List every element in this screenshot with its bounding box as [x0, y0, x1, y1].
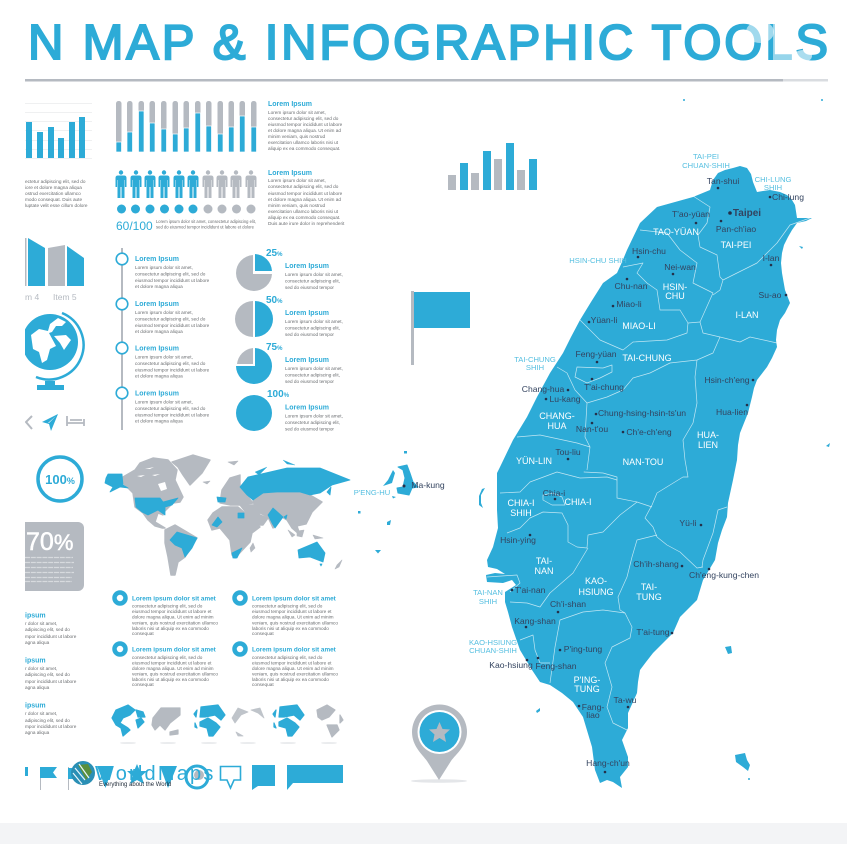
county labels: P'ING-: [574, 675, 600, 685]
timeline: consectetur adipiscing elit, sed do: [135, 406, 206, 411]
text grid: four features: Lorem ipsum dolor sit amet: [132, 596, 217, 602]
left column text list: ipsum: [25, 702, 46, 710]
left column text list: agna aliqua: [25, 685, 50, 690]
row of small globes: [112, 705, 343, 744]
text block: bars description: [268, 101, 343, 151]
county labels: TAI-: [536, 556, 552, 566]
logo: WorldMaps watermark: [71, 761, 216, 788]
timeline: eiusmod tempor incididunt ut labore: [135, 278, 210, 283]
footer band: [0, 823, 847, 844]
text grid: four features: laboris nisi ut aliquip ex ea commodo: [252, 626, 329, 631]
city labels: P'ing-tung: [564, 644, 602, 654]
score 60/100: 60/100: [116, 219, 153, 233]
city labels: Feng-shan: [535, 661, 577, 671]
county labels: TAI-PEI: [721, 240, 751, 250]
text block: bars description: exercitation ullamco laboris nisi ut: [268, 140, 339, 145]
text grid: four features: veniam, quis nostrud exercitation ullamco: [132, 672, 218, 676]
city labels: Ch'eng-kung-chen: [689, 570, 759, 580]
text block: bars description: consectetur adipiscing elit, sed do: [268, 116, 339, 121]
text grid: four features: consequat: [252, 682, 274, 687]
icon: flag: [411, 291, 470, 365]
city labels: Pan-ch'iao: [716, 224, 756, 234]
county labels: MIAO-LI: [622, 321, 656, 331]
city labels: Yü-li: [679, 518, 697, 528]
county labels: TAI-: [641, 582, 657, 592]
title: N MAP & INFOGRAPHIC TOOLS: [28, 16, 828, 70]
left column text list: adipiscing elit, sed do: [25, 718, 70, 723]
text grid: four features: consectetur adipiscing elit, sed do: [132, 604, 203, 608]
row of map markers and speech bubbles: [25, 764, 343, 790]
municipality labels outside the coast: SHIH: [479, 597, 497, 606]
pie charts: 75%: [266, 342, 283, 353]
text block: people description: Duis aute irure dolor in reprehenderit: [268, 221, 345, 226]
county labels: YÜN-LIN: [516, 456, 552, 466]
timeline: Lorem ipsum dolor sit amet,: [135, 265, 193, 270]
city labels: Ch'i-shan: [550, 599, 586, 609]
city labels: T'ai-chung: [584, 382, 624, 392]
left column text after chart: modo consequat. Duis aute: [25, 197, 82, 202]
pie charts: Lorem Ipsum: [285, 357, 329, 364]
left column text after chart: ostrud exercitation ullamco: [25, 191, 81, 196]
left column text list: adipiscing elit, sed do: [25, 627, 70, 632]
text block: bars description: et dolore magna aliqua. Ut enim ad: [268, 128, 341, 133]
county labels: TAO-YÜAN: [653, 227, 699, 237]
score 60/100: [116, 219, 256, 233]
folded column chart: m 4: [25, 292, 39, 302]
text grid: four features: consequat: [252, 631, 274, 636]
city labels: Chia-i: [543, 488, 565, 498]
city labels: Lu-kang: [549, 394, 581, 404]
county labels: HSIUNG: [578, 587, 614, 597]
county labels: NAN: [534, 566, 554, 576]
county labels: HUA-: [697, 430, 719, 440]
score 60/100: Lorem ipsum dolor sit amet, consectetur adipiscing elit,: [156, 219, 256, 224]
text grid: four features: veniam, quis nostrud exercitation ullamco: [252, 672, 338, 676]
icon: desk globe: [22, 313, 84, 390]
city labels: Ch'ih-shang: [633, 559, 679, 569]
pie charts: Lorem ipsum dolor sit amet,: [285, 414, 343, 418]
left column text list: adipiscing elit, sed do: [25, 672, 70, 677]
city labels: Hsin-chu: [632, 246, 666, 256]
left crop edge: [0, 0, 25, 822]
timeline: consectetur adipiscing elit, sed do: [135, 361, 206, 366]
timeline: Lorem Ipsum: [135, 346, 179, 352]
municipality labels outside the coast: CHI-LUNG: [755, 175, 791, 184]
timeline: consectetur adipiscing elit, sed do: [135, 272, 206, 276]
municipality labels outside the coast: CHUAN-SHIH: [682, 161, 730, 170]
text grid: four features: consequat: [132, 682, 154, 687]
mainland outline: [486, 166, 812, 788]
text grid: four features: dolore magna aliqua. Ut enim ad minim: [252, 666, 334, 671]
folded column chart: Item 5: [53, 292, 77, 302]
city labels: [489, 176, 804, 768]
mini bar chart above map: [448, 143, 537, 190]
timeline: [116, 248, 210, 430]
timeline: et dolore magna aliqua: [135, 284, 183, 289]
text block: people description: aliquip ex ea commodo consequat.: [268, 215, 340, 220]
municipality labels outside the coast: TAI-CHUNG: [514, 355, 556, 364]
municipality labels outside the coast: SHIH: [526, 363, 544, 372]
left column bar chart: [25, 104, 92, 158]
text grid: four features: dolore magna aliqua. Ut enim ad minim: [132, 614, 214, 620]
city labels: Tan-shui: [707, 176, 739, 186]
municipality labels outside the coast: TAI-PEI: [693, 152, 719, 161]
pie charts: consectetur adipiscing elit,: [285, 420, 340, 425]
city labels: Hsin-ch'eng: [704, 375, 750, 385]
city labels: Hsin-ying: [500, 535, 536, 545]
folded column chart: [25, 238, 84, 302]
county labels: CHIA-I: [508, 498, 534, 508]
left column text list: ipsum: [25, 658, 46, 664]
score 60/100: sed do eiusmod tempor incididunt ut labore et dolore: [156, 224, 254, 230]
pie charts: sed do eiusmod tempor: [285, 379, 334, 384]
timeline: Lorem ipsum dolor sit amet,: [135, 400, 193, 404]
text grid: four features: dolore magna aliqua. Ut enim ad minim: [252, 614, 334, 620]
pie charts: sed do eiusmod tempor: [285, 285, 334, 290]
left column text list: mpor incididunt ut labore: [25, 634, 77, 639]
text block: people description: eiusmod tempor incididunt ut labore: [268, 191, 343, 196]
city labels: Ch'e-ch'eng: [626, 427, 672, 437]
municipality labels outside the coast: HSIN-CHU SHIH: [569, 256, 627, 265]
logo: WorldMaps watermark: WorldMaps: [95, 763, 216, 785]
city labels: Chang-hua: [522, 384, 564, 394]
text grid: four features: veniam, quis nostrud exercitation ullamco: [132, 620, 218, 626]
text block: people description: Lorem Ipsum: [268, 170, 312, 177]
text grid: four features: eiusmod tempor incididunt ut labore et: [252, 609, 332, 614]
people pictogram: [116, 170, 256, 214]
pie charts: consectetur adipiscing elit,: [285, 326, 340, 330]
pie charts: Lorem Ipsum: [285, 263, 329, 270]
county labels: HSIN-: [663, 282, 687, 292]
text block: people description: [268, 170, 345, 226]
text grid: four features: Lorem ipsum dolor sit amet: [252, 596, 337, 602]
text grid: four features: consectetur adipiscing elit, sed do: [132, 655, 203, 660]
city labels: Nan-t'ou: [576, 424, 608, 434]
pie charts: Lorem Ipsum: [285, 404, 329, 412]
left column text after chart: ectetur adipiscing elit, sed do: [25, 179, 86, 184]
icons: chevron, paper plane, bed: [26, 414, 84, 431]
Penghu labels: P'ENG-HU: [354, 488, 390, 497]
pie charts: Lorem ipsum dolor sit amet,: [285, 366, 343, 371]
text block: people description: consectetur adipiscing elit, sed do: [268, 184, 339, 189]
left column text list: r dolor sit amet,: [25, 711, 57, 716]
left column text after chart: [25, 179, 88, 208]
city labels: Feng-yüan: [575, 349, 617, 359]
municipality labels outside the coast: TAI-NAN: [473, 588, 503, 597]
city labels: Kang-shan: [514, 616, 556, 626]
county labels: SHIH: [510, 508, 532, 518]
left column text list: mpor incididunt ut labore: [25, 724, 77, 729]
text grid: four features: laboris nisi ut aliquip ex ea commodo: [252, 677, 329, 682]
text grid: four features: consectetur adipiscing elit, sed do: [252, 655, 323, 660]
pie charts: Lorem ipsum dolor sit amet,: [285, 272, 343, 277]
city labels: Hua-lien: [716, 407, 748, 417]
municipality labels outside the coast: KAO-HSIUNG: [469, 638, 517, 647]
timeline: eiusmod tempor incididunt ut labore: [135, 368, 210, 372]
county labels: NAN-TOU: [623, 457, 663, 467]
pie charts: Lorem ipsum dolor sit amet,: [285, 319, 343, 324]
text block: bars description: eiusmod tempor incididunt ut labore: [268, 122, 343, 127]
city labels: T'ai-nan: [515, 585, 546, 595]
county labels: CHANG-: [539, 411, 575, 421]
pie charts: 50%: [266, 295, 283, 306]
city labels: liao: [586, 710, 600, 720]
text block: people description: exercitation ullamco laboris nisi ut: [268, 209, 339, 214]
text grid: four features: veniam, quis nostrud exercitation ullamco: [252, 620, 338, 626]
timeline: Lorem ipsum dolor sit amet,: [135, 310, 193, 315]
city labels: I-lan: [763, 253, 780, 263]
timeline: Lorem Ipsum: [135, 256, 179, 263]
county labels: LIEN: [698, 440, 718, 450]
city labels: T'ao-yüan: [672, 209, 710, 219]
timeline: Lorem Ipsum: [135, 301, 179, 308]
county labels: HUA: [547, 421, 567, 431]
text grid: four features: [114, 592, 338, 687]
city labels: Kao-hsiung: [489, 660, 533, 670]
100% ring: 100%: [45, 472, 75, 487]
header rule: [25, 79, 828, 82]
world map: [105, 455, 350, 575]
left column text list: agna aliqua: [25, 640, 50, 645]
city labels: Chung-hsing-hsin-ts'un: [598, 408, 686, 418]
city labels: Su-ao: [759, 290, 782, 300]
text grid: four features: Lorem ipsum dolor sit amet: [252, 646, 337, 654]
Taiwan map: [469, 99, 830, 788]
city labels: Miao-li: [616, 299, 642, 309]
city labels: Chi-lung: [772, 192, 804, 202]
municipality labels outside the coast: SHIH: [764, 183, 782, 192]
logo: WorldMaps watermark: Everything about the World: [99, 782, 171, 788]
timeline: Lorem Ipsum: [135, 390, 179, 398]
Penghu labels: [354, 480, 445, 497]
Penghu labels: Ma-kung: [411, 480, 445, 490]
pie charts: consectetur adipiscing elit,: [285, 278, 340, 284]
pie charts: sed do eiusmod tempor: [285, 426, 334, 432]
text block: people description: minim veniam, quis nostrud: [268, 203, 325, 208]
text grid: four features: eiusmod tempor incididunt ut labore et: [132, 609, 212, 614]
timeline: Lorem ipsum dolor sit amet,: [135, 354, 193, 360]
city labels: Hang-ch'un: [586, 758, 630, 768]
left column text list: mpor incididunt ut labore: [25, 679, 77, 684]
left column text list: r dolor sit amet,: [25, 621, 57, 626]
pie charts: consectetur adipiscing elit,: [285, 372, 340, 378]
city labels: Nei-wan: [664, 262, 696, 272]
city labels: Fang-: [582, 702, 604, 712]
city labels: Chu-nan: [615, 281, 648, 291]
70% card: 70%: [26, 528, 73, 556]
county labels: CHU: [665, 291, 685, 301]
municipality labels outside the coast: CHUAN-SHIH: [469, 646, 517, 655]
pie charts: 25%: [266, 248, 283, 259]
left column text after chart: luptate velit esse cillum dolore: [25, 203, 88, 208]
municipality labels outside the coast: [469, 152, 791, 655]
Penghu islands: [358, 451, 418, 554]
pie charts: sed do eiusmod tempor: [285, 332, 334, 337]
left column text list: ipsum: [25, 612, 46, 620]
left column text list: agna aliqua: [25, 730, 50, 735]
text grid: four features: laboris nisi ut aliquip ex ea commodo: [132, 626, 209, 631]
city labels: Tou-liu: [555, 447, 581, 457]
pie charts: 100%: [267, 389, 290, 400]
text block: bars description: Lorem ipsum dolor sit amet,: [268, 110, 326, 115]
city labels: Taipei: [733, 208, 761, 219]
offshore islets: [479, 99, 830, 780]
timeline: eiusmod tempor incididunt ut labore: [135, 412, 210, 418]
county labels: I-LAN: [735, 310, 759, 320]
100% ring: [38, 457, 82, 501]
city labels: Yüan-li: [591, 315, 617, 325]
timeline: et dolore magna aliqua: [135, 418, 183, 424]
text grid: four features: Lorem ipsum dolor sit amet: [132, 646, 217, 654]
county boundaries: [693, 196, 723, 280]
text block: bars description: minim veniam, quis nostrud: [268, 134, 325, 139]
city labels: T'ai-tung: [636, 627, 670, 637]
70% card: [15, 522, 84, 591]
vertical progress bars: [116, 101, 256, 152]
timeline: eiusmod tempor incididunt ut labore: [135, 323, 210, 328]
city labels: Ta-wu: [614, 695, 637, 705]
pie charts: [235, 248, 343, 432]
city dots: [511, 187, 787, 773]
county labels: CHIA-I: [564, 497, 592, 507]
left column text list: [25, 612, 77, 735]
text grid: four features: laboris nisi ut aliquip ex ea commodo: [132, 677, 209, 682]
icon: map pin with star: [411, 704, 467, 783]
timeline: consectetur adipiscing elit, sed do: [135, 316, 206, 322]
text block: bars description: Lorem Ipsum: [268, 101, 312, 108]
county labels: TAI-CHUNG: [622, 353, 672, 363]
timeline: et dolore magna aliqua: [135, 374, 183, 378]
text grid: four features: eiusmod tempor incididunt ut labore et: [252, 660, 332, 666]
text grid: four features: eiusmod tempor incididunt ut labore et: [132, 660, 212, 666]
timeline: et dolore magna aliqua: [135, 329, 183, 334]
county labels: [508, 227, 759, 694]
text block: people description: Lorem ipsum dolor sit amet,: [268, 178, 326, 183]
left column text after chart: iore et dolore magna aliqua: [25, 185, 82, 190]
text grid: four features: consequat: [132, 631, 154, 636]
text block: people description: et dolore magna aliqua. Ut enim ad: [268, 197, 341, 202]
county labels: TUNG: [574, 684, 600, 694]
county labels: TUNG: [636, 592, 662, 602]
text block: bars description: aliquip ex ea commodo consequat.: [268, 146, 340, 151]
text grid: four features: dolore magna aliqua. Ut enim ad minim: [132, 666, 214, 671]
pie charts: Lorem Ipsum: [285, 310, 329, 317]
county labels: KAO-: [585, 576, 607, 586]
left column text list: r dolor sit amet,: [25, 666, 57, 671]
text grid: four features: consectetur adipiscing elit, sed do: [252, 604, 323, 608]
